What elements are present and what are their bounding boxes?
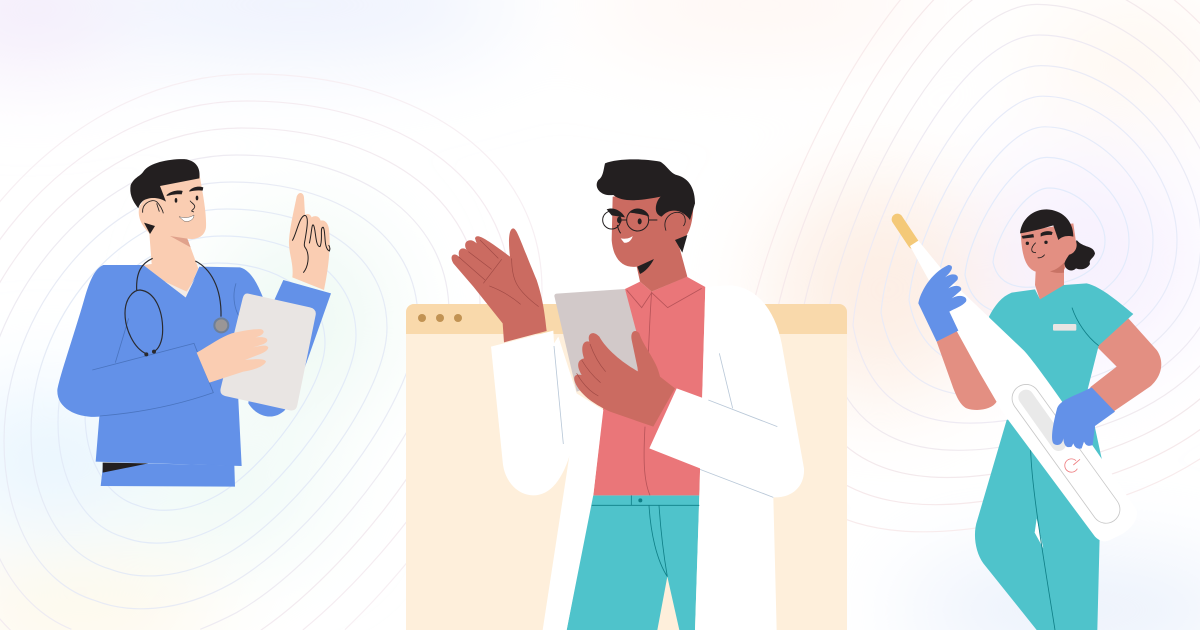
arm seams <box>92 283 239 416</box>
upper glove <box>918 265 966 342</box>
leg gap <box>1035 518 1043 548</box>
nape hair <box>144 223 155 234</box>
nose <box>1032 243 1036 253</box>
hair bun <box>1064 240 1095 270</box>
trousers <box>975 400 1102 630</box>
glasses <box>603 209 657 233</box>
eyebrows <box>167 187 203 196</box>
palm lines <box>458 240 539 307</box>
lower glove <box>1052 387 1115 449</box>
name badge <box>1053 324 1076 331</box>
contour lines: left <box>0 74 542 630</box>
figure: right nurse with thermometer <box>897 209 1161 630</box>
shirt placket and collar lines <box>627 288 702 353</box>
finger lines <box>577 344 606 396</box>
pants <box>567 495 699 630</box>
sleeve seam <box>1031 308 1099 630</box>
hair <box>1020 209 1073 240</box>
power icon <box>1065 459 1080 472</box>
hair <box>130 159 200 208</box>
thermometer tip <box>897 219 913 243</box>
stethoscope ear tips <box>144 350 156 356</box>
neck shadow <box>170 236 191 247</box>
neck and head skin <box>139 173 206 297</box>
contour lines: right <box>741 0 1200 532</box>
figure: left doctor in blue scrubs <box>57 159 331 487</box>
coat right panel <box>695 285 804 630</box>
stethoscope <box>125 258 221 354</box>
eyes <box>617 217 642 224</box>
mouth <box>179 215 194 221</box>
smile <box>621 236 633 243</box>
neck shadow <box>1050 263 1064 273</box>
coat seam lines <box>554 346 777 497</box>
eyes <box>1026 241 1048 245</box>
near arm <box>1090 318 1161 412</box>
eyebrows <box>607 208 649 217</box>
window header bar <box>406 304 847 334</box>
tablet <box>554 289 638 392</box>
window body <box>406 304 847 630</box>
mouth <box>1038 255 1045 258</box>
stethoscope chest piece <box>214 318 228 332</box>
belt button <box>638 498 642 502</box>
shirt hem line <box>644 427 650 495</box>
browser window panel <box>406 304 847 630</box>
scrub top <box>989 283 1133 403</box>
ear <box>1057 235 1077 255</box>
pants belt and fly lines <box>592 495 699 577</box>
scrub torso <box>57 265 263 466</box>
thermometer body <box>910 241 1137 541</box>
hand on clipboard <box>197 329 268 383</box>
front sleeve <box>649 388 797 497</box>
raised hand <box>289 193 330 290</box>
eyebrows <box>1022 231 1053 239</box>
eyes <box>175 196 198 203</box>
undershirt V <box>165 278 195 297</box>
nose <box>190 201 195 212</box>
pants <box>101 463 235 487</box>
back arm sleeve <box>248 280 331 417</box>
hand finger lines <box>292 215 330 273</box>
hair <box>597 159 695 220</box>
left sleeve <box>491 331 572 495</box>
neck and head <box>612 193 693 292</box>
ear <box>665 212 685 231</box>
beard marks <box>637 235 687 274</box>
shirt <box>593 277 705 495</box>
far arm <box>937 330 997 410</box>
belt shadow <box>103 463 148 473</box>
thermometer screen outline <box>1026 398 1106 509</box>
window dots <box>418 314 462 322</box>
raised hand <box>452 228 547 342</box>
thermometer display <box>1026 397 1059 443</box>
ear lines <box>143 201 163 213</box>
neck and face <box>1021 223 1077 300</box>
clipboard <box>220 294 316 411</box>
figure: center doctor in white coat <box>452 159 804 630</box>
coat left panel <box>543 337 603 630</box>
lower hand <box>574 331 675 427</box>
